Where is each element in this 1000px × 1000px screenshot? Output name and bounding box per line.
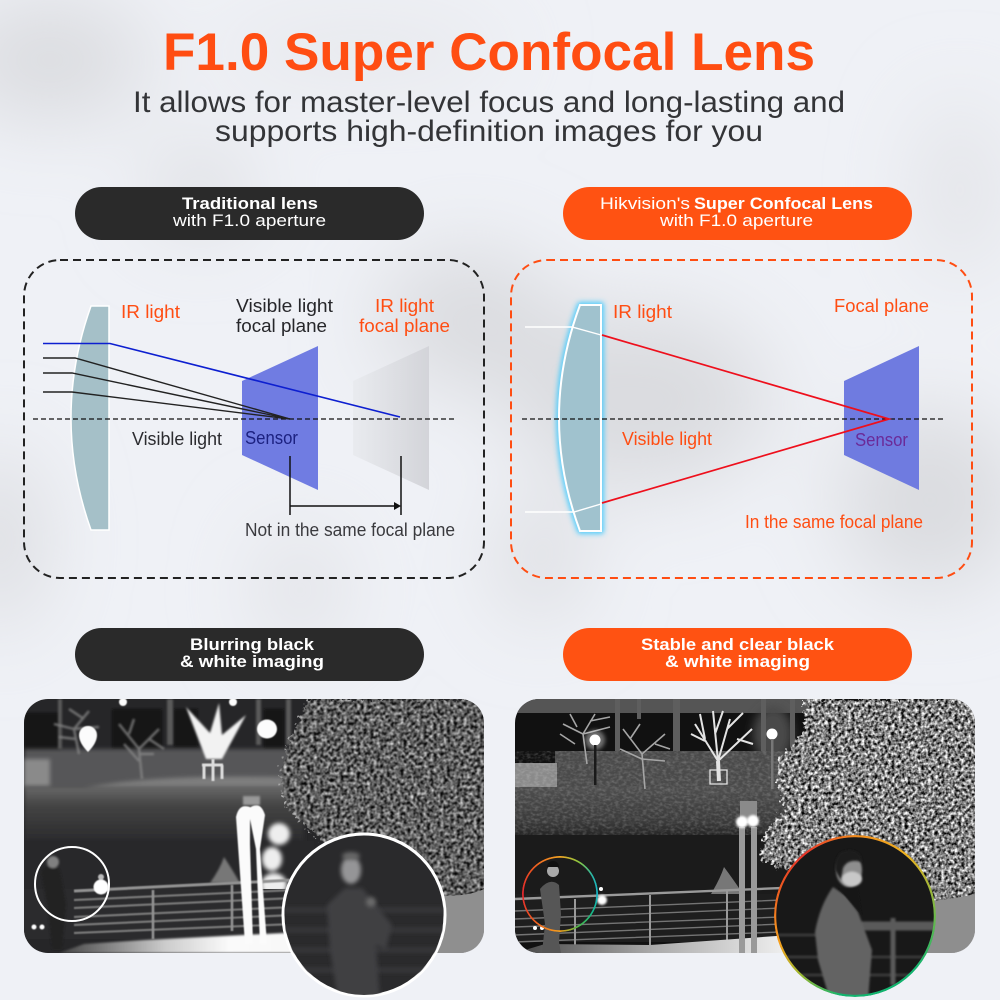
pill: blurring imaging: Blurring black	[190, 635, 315, 654]
panel: super confocal lens diagram	[511, 260, 972, 578]
labels: traditional: Visible light	[236, 296, 333, 316]
icon: confocal lens with glow	[559, 305, 601, 531]
front lamp posts	[236, 805, 267, 944]
background trees	[54, 709, 164, 779]
title: F1.0 Super Confocal Lens	[163, 23, 815, 82]
panel border: traditional	[24, 260, 484, 578]
small colour ring: clear person	[522, 856, 598, 932]
focal distance bracket	[290, 456, 401, 515]
stairs	[515, 763, 557, 787]
IR ray	[43, 344, 400, 417]
person far	[42, 854, 66, 939]
bush	[760, 699, 985, 914]
labels: traditional: IR light	[375, 296, 434, 316]
small circle: blurry person	[35, 847, 109, 921]
trunks	[58, 699, 291, 749]
pill: clear imaging: Stable and clear black	[641, 635, 835, 654]
pill: traditional lens	[75, 187, 424, 240]
labels: traditional: IR light	[121, 302, 180, 322]
labels: super confocal: In the same focal plane	[745, 512, 923, 532]
subtitle: supports high-definition images for you	[215, 115, 763, 148]
lamp halo	[753, 706, 793, 762]
subtitle	[133, 86, 845, 148]
background trees	[560, 714, 670, 789]
bright lamp by fence	[32, 874, 108, 930]
hedge	[515, 787, 800, 837]
labels: super confocal: IR light	[613, 302, 672, 322]
upper lawn	[555, 751, 795, 789]
labels: traditional: Visible light	[132, 429, 222, 449]
pill: clear imaging: & white imaging	[665, 652, 810, 671]
labels: traditional: focal plane	[359, 316, 450, 336]
labels: traditional: focal plane	[236, 316, 327, 336]
trunks	[615, 699, 795, 754]
large colour ring: clear person	[774, 835, 936, 997]
pill: blurring imaging: & white imaging	[180, 652, 324, 671]
IR focal plane	[353, 346, 429, 490]
pill: super confocal lens: with F1.0 aperture	[659, 211, 813, 230]
magnified circle: clear person	[775, 837, 935, 1000]
pill: super confocal lens: Hikvision's	[600, 194, 690, 213]
lower fence zone	[515, 895, 777, 942]
ground	[62, 930, 484, 953]
photo: blurry night scene	[24, 698, 494, 953]
fence	[74, 880, 294, 939]
water	[515, 835, 805, 895]
optical axis	[522, 418, 946, 420]
pill: blurring imaging	[75, 628, 424, 681]
labels: super confocal: Sensor	[855, 430, 908, 450]
white tree	[691, 711, 753, 784]
fence	[515, 886, 780, 945]
small plant	[711, 867, 739, 894]
top building	[515, 699, 815, 713]
labels: super confocal	[613, 296, 929, 532]
bush	[278, 699, 484, 896]
pill: super confocal lens: Super Confocal Lens	[694, 194, 873, 213]
labels: traditional: Not in the same focal plane	[245, 520, 455, 540]
upper lawn	[24, 749, 294, 787]
lamps	[585, 728, 778, 789]
labels: traditional	[121, 296, 455, 540]
pill: clear imaging	[563, 628, 912, 681]
magnified circle: blurry person	[283, 834, 445, 1000]
pill: traditional lens: Traditional lens	[182, 194, 318, 213]
panel: traditional lens diagram	[24, 260, 484, 578]
labels: traditional: Sensor	[245, 428, 298, 448]
icon: traditional lens	[71, 306, 109, 530]
sensor plane	[242, 346, 318, 490]
labels: super confocal: Visible light	[622, 429, 712, 449]
labels: super confocal: Focal plane	[834, 296, 929, 316]
bright lamp by fence	[533, 887, 607, 930]
photo: sharp night scene	[515, 699, 985, 953]
small plant	[210, 857, 240, 883]
visible light rays	[43, 358, 290, 419]
white tree	[186, 703, 246, 759]
water	[24, 841, 314, 891]
pill: traditional lens: with F1.0 aperture	[172, 211, 326, 230]
panel border: super confocal	[511, 260, 972, 578]
hedge	[24, 786, 304, 842]
subtitle: It allows for master-level focus and long-lasting and	[133, 86, 845, 119]
front lamp posts	[736, 801, 759, 953]
lower fence zone	[24, 889, 299, 939]
red rays	[602, 335, 889, 503]
dark windows	[24, 709, 284, 755]
pill: super confocal lens	[563, 187, 912, 240]
bright lawn band	[84, 776, 286, 789]
white rays	[525, 327, 601, 512]
optical axis	[33, 418, 456, 420]
ground	[526, 930, 975, 953]
lamps	[79, 698, 277, 752]
person far	[540, 861, 561, 953]
sensor	[844, 346, 919, 490]
bright flowers	[261, 823, 290, 897]
